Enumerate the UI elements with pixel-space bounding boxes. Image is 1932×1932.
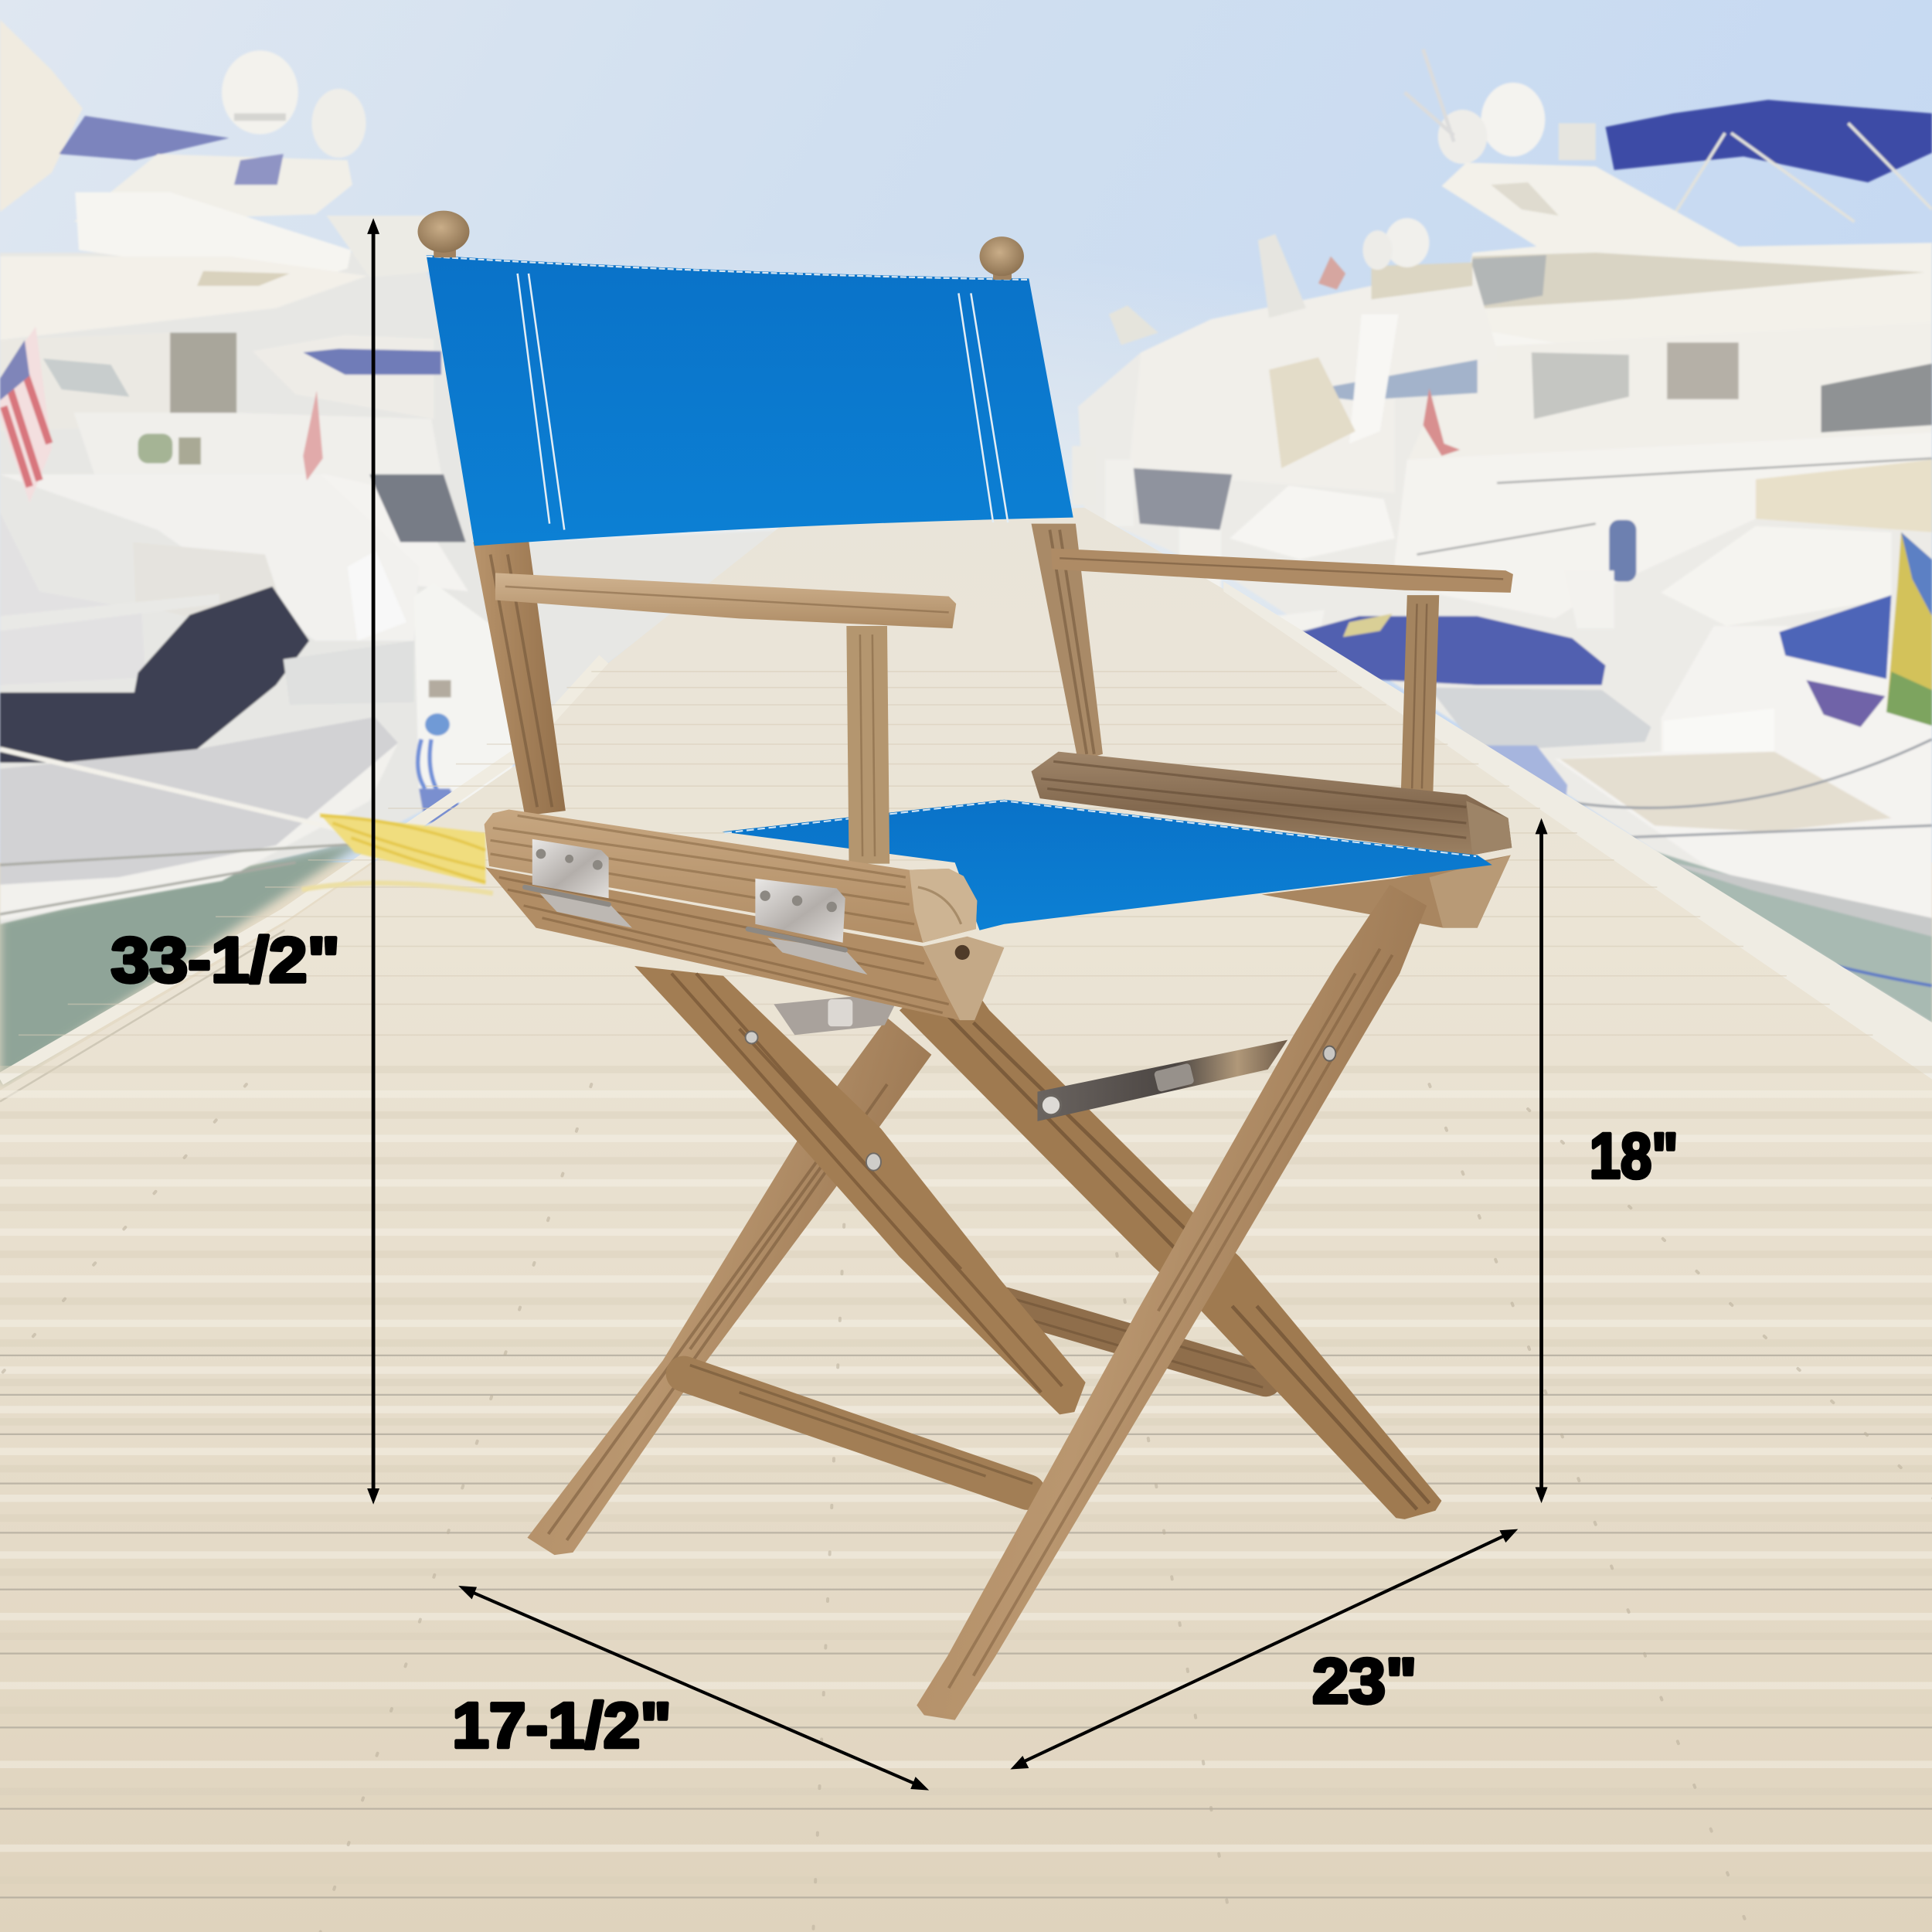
label: depth: 17-1/2" [452, 1689, 672, 1761]
yellow rope coil [302, 813, 493, 893]
chair: screw on crossing [746, 1032, 881, 1171]
flag: right [1886, 532, 1932, 726]
chair: seat canvas [722, 800, 1492, 930]
background: right moored boats [1072, 49, 1932, 1029]
chair: cross leg falling to rear right [634, 966, 1086, 1414]
chair: right arm and post [1051, 549, 1513, 794]
chair: right seat rail [1032, 752, 1512, 855]
chair: back posts [473, 524, 1103, 815]
dock planks [0, 672, 1932, 1932]
chair: left arm and post [495, 573, 956, 864]
chair: back canvas [427, 255, 1073, 546]
label: overall height: 33-1/2" [111, 924, 340, 996]
flag: left american [0, 327, 323, 503]
chair: hinges [525, 839, 867, 975]
chair: steel strap front [1037, 1040, 1287, 1121]
chair: cross leg rear rising right [527, 1018, 931, 1555]
dock edges [0, 582, 1932, 1101]
dimension arrow: depth [458, 1586, 929, 1791]
background: wooden dock [0, 508, 1932, 1932]
chair: right under seat rail [1262, 855, 1511, 928]
chair: front lower rail [485, 867, 1004, 1020]
chair [417, 211, 1513, 1720]
label: width: 23" [1312, 1645, 1417, 1716]
dimension arrow: overall height [367, 218, 379, 1505]
dimension arrow: seat height [1536, 818, 1548, 1503]
chair: front long leg [917, 885, 1427, 1720]
background: left moored boats [0, 20, 788, 924]
chair: steel strap rear [774, 995, 897, 1035]
dimension arrow: width [1010, 1529, 1518, 1770]
background: left water [0, 838, 369, 1084]
chair: front upper rail [485, 810, 977, 943]
chair: knobs [417, 211, 1024, 280]
right water [1651, 850, 1932, 1022]
chair: rung front [684, 1366, 1032, 1492]
background: sky [0, 0, 1932, 862]
label: seat height: 18" [1590, 1120, 1679, 1192]
chair: rung rear [1004, 1296, 1265, 1387]
chair: cross leg to right foot [900, 961, 1441, 1519]
